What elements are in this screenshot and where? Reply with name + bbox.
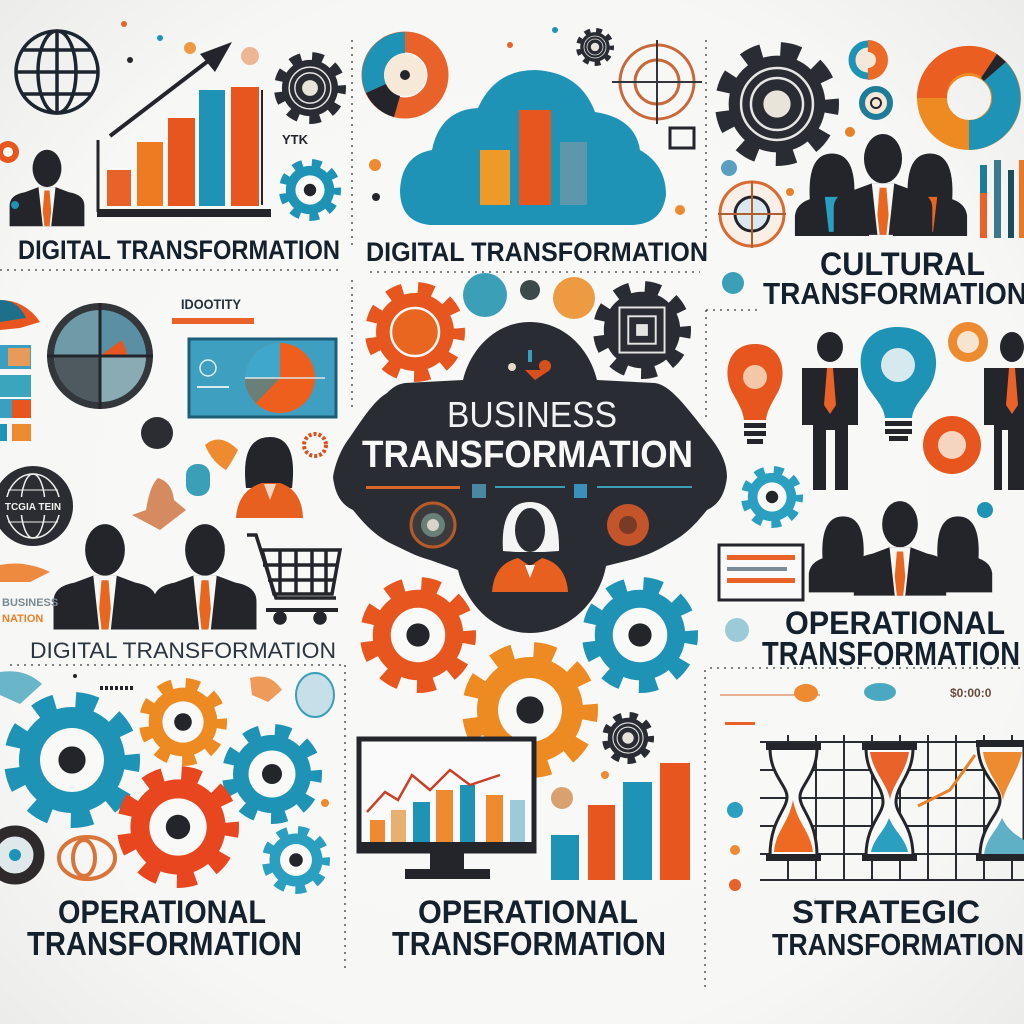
icon: red gear (125, 774, 231, 880)
small decorations (721, 127, 855, 294)
panel: bottom-left operational transformation (0, 671, 334, 962)
top small icons (508, 350, 551, 380)
icon: blue gear (283, 163, 337, 217)
label: OPERATIONAL (785, 605, 1005, 641)
divider line (366, 484, 692, 498)
icon: orange gear (145, 684, 221, 760)
icon: blue gear (745, 470, 799, 524)
icon: globe badge: TCGIA TEIN (5, 502, 61, 513)
icon: standing figure right (984, 332, 1024, 490)
dark cloud (333, 322, 727, 633)
panel: middle-left digital transformation (0, 296, 340, 663)
label (27, 894, 302, 962)
bar chart (97, 87, 271, 217)
icon: two businessmen (54, 524, 256, 629)
chart screen (189, 339, 336, 417)
icon: small blue gear (266, 830, 326, 890)
icon: woman center (492, 502, 568, 592)
label: DIGITAL TRANSFORMATION (30, 638, 336, 663)
icon: globe badge (0, 466, 73, 546)
bar chart (551, 763, 690, 880)
small text: YTK (282, 132, 309, 147)
label: DIGITAL TRANSFORMATION (366, 237, 708, 267)
icon: target (718, 181, 786, 248)
icons: badges (923, 322, 993, 518)
icon: small badges (852, 40, 890, 117)
icon: dark gear top (599, 287, 685, 373)
icon: shopping cart (247, 535, 340, 623)
icon: pie chart (917, 46, 1020, 150)
arrow: rising trend (110, 42, 232, 136)
icons: color blobs (463, 273, 595, 319)
icon: large blue gear (13, 701, 131, 819)
icon: dial (47, 303, 153, 409)
icons: blobs (132, 417, 326, 530)
icon: globe (16, 31, 98, 113)
icon: orange gear (471, 651, 589, 769)
panel: top-right cultural transformation (718, 40, 1024, 311)
label: CULTURAL (820, 246, 985, 282)
icon: blue gear (590, 585, 690, 685)
label: TRANSFORMATION (392, 925, 666, 962)
icon: target (612, 40, 702, 124)
label: OPERATIONAL (418, 894, 638, 930)
icon: hourglass one (766, 743, 821, 861)
title: BUSINESS (447, 394, 617, 435)
icon: monitor chart (359, 739, 534, 879)
icon: dark gear (0, 831, 39, 879)
icon: small dark gear (605, 715, 651, 761)
trend arrow (918, 755, 975, 806)
label: DIGITAL TRANSFORMATION (18, 235, 340, 265)
small decorations (0, 21, 259, 209)
icon: small dark gear (578, 30, 612, 64)
small text: IDOOTITY (181, 296, 242, 312)
icon: large dark gear (723, 50, 831, 158)
icon: hourglass two (862, 743, 917, 861)
icon: donut chart (362, 32, 438, 117)
small decoration (725, 618, 749, 642)
grid (760, 735, 1024, 880)
panel: bottom-center operational transformation (359, 585, 690, 962)
icon: slide card (719, 545, 803, 600)
label (772, 894, 1024, 962)
icon: red gear top (372, 288, 458, 376)
panel: middle-right operational transformation (719, 322, 1024, 672)
small decorations (369, 27, 694, 215)
orange bar (172, 318, 254, 324)
icon: woman with orange top (236, 437, 303, 518)
icon: outlined badge (59, 837, 115, 879)
icon: businessman (10, 150, 84, 226)
panel: top-left digital transformation (0, 21, 341, 265)
panel: bottom-right strategic transformation (720, 683, 1024, 962)
label: OPERATIONAL (58, 894, 266, 930)
left blocks (0, 345, 31, 441)
top decoration: $0:00:0 (950, 686, 992, 700)
top decoration (720, 683, 992, 891)
icon: cloud with bars (400, 70, 666, 225)
label (762, 605, 1020, 672)
icon: dark gear (279, 57, 341, 119)
icon: team (795, 134, 967, 236)
icon: red gear (368, 585, 468, 685)
title (362, 394, 693, 476)
title: TRANSFORMATION (362, 434, 693, 476)
icon: hourglass three (976, 740, 1024, 861)
small text (0, 564, 58, 625)
label (392, 894, 666, 962)
icon: standing figure (802, 332, 858, 490)
small decorations (0, 671, 334, 807)
icon: eye (0, 300, 40, 330)
icon: orange lightbulb (727, 344, 783, 444)
label: TRANSFORMATION (27, 925, 302, 962)
icon: team (809, 501, 992, 596)
icon: blue gear right (228, 730, 316, 818)
icon: blue lightbulb (861, 327, 936, 441)
bars (980, 160, 1024, 238)
label: STRATEGIC (792, 894, 980, 930)
small text: BUSINESS (2, 597, 58, 609)
panel: center business transformation (333, 273, 727, 633)
badges (411, 503, 649, 547)
small decoration (551, 771, 609, 809)
small text: NATION (2, 613, 43, 625)
panel: top-center digital transformation (362, 27, 708, 267)
label (763, 246, 1024, 311)
